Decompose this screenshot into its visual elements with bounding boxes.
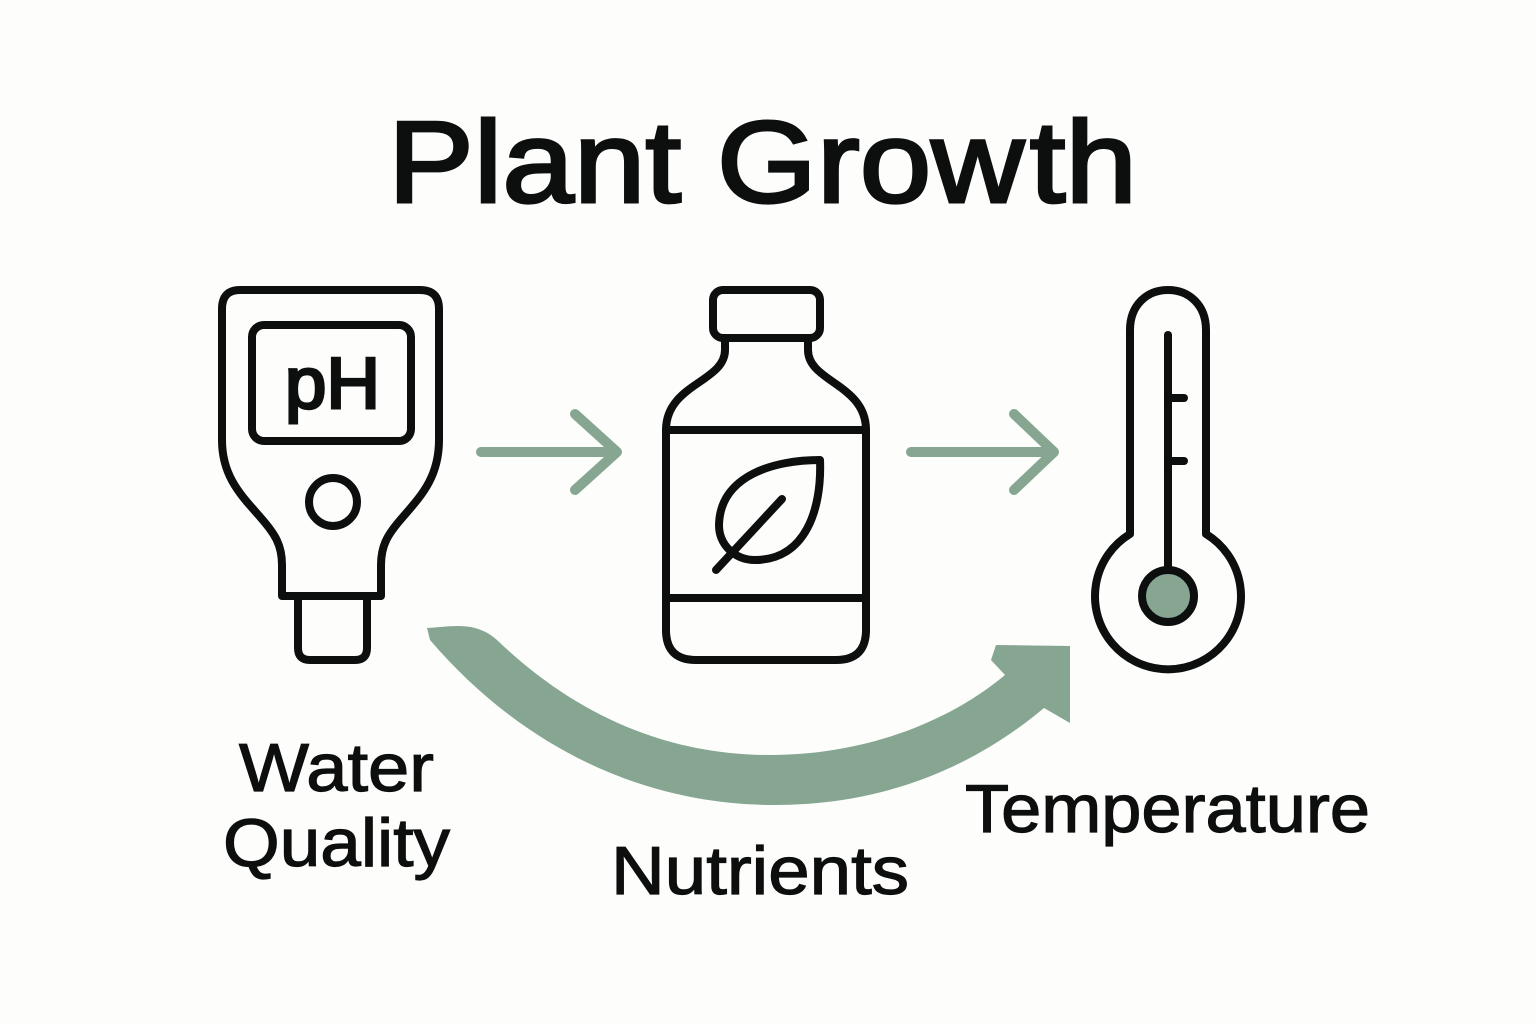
icon: thermometer	[1095, 290, 1241, 669]
arrow: meter to bottle	[481, 414, 617, 490]
icon: leaf	[716, 460, 820, 570]
icon: pH meter	[222, 290, 439, 660]
title: Plant Grow th	[388, 97, 1137, 227]
label: temperature: Temperature	[965, 771, 1370, 847]
label: water quality	[223, 730, 450, 881]
icon: nutrient bottle	[666, 290, 866, 660]
pH label: pH	[285, 344, 380, 424]
label: water quality: Quality	[223, 805, 450, 881]
label: water quality: Water	[239, 730, 434, 806]
arrow: large curved arrow	[427, 626, 1070, 805]
arrow: bottle to thermometer	[911, 414, 1054, 490]
label: nutrients: Nutrients	[611, 833, 909, 909]
